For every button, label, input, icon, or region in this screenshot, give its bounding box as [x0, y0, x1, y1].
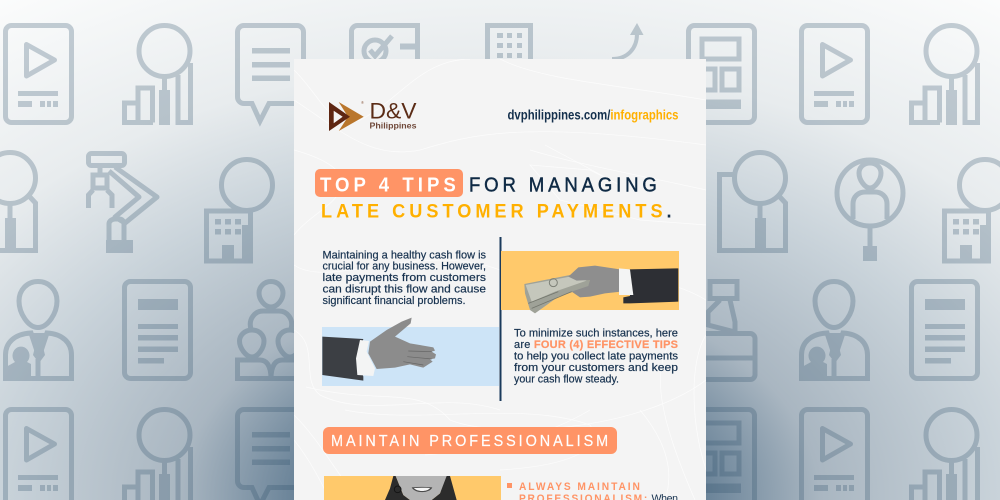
tips intro paragraph: are FOUR (4) EFFECTIVE TIPS — [514, 339, 678, 351]
intro paragraph: Maintaining a healthy cash flow is — [322, 249, 486, 261]
title highlight pill — [315, 169, 463, 197]
intro paragraph: late payments from customers — [322, 272, 487, 284]
tips intro paragraph: To minimize such instances, here — [514, 328, 678, 340]
website url: dvphilippines.com/infographics — [508, 106, 679, 122]
image: open hand on blue — [322, 318, 499, 386]
intro paragraph: crucial for any business. However, — [322, 261, 486, 273]
intro paragraph: can disrupt this flow and cause — [322, 284, 486, 296]
tips intro paragraph — [514, 328, 679, 386]
logo: D&V Philippines: D&V — [370, 98, 417, 123]
icon row 4 — [6, 410, 978, 500]
icon row 3 — [6, 282, 978, 381]
tips intro paragraph: from your customers and keep — [514, 362, 678, 374]
section heading: maintain professionalism — [323, 427, 617, 454]
icon row 2 — [0, 152, 1000, 261]
image: hand holding cash on yellow — [501, 251, 679, 313]
tip bullet text: ALWAYS MAINTAIN — [519, 481, 640, 493]
logo: D&V Philippines: Philippines — [370, 122, 417, 131]
section heading: maintain professionalism: MAINTAIN PROFESSIONALISM — [331, 433, 608, 450]
tips intro paragraph: to help you collect late payments — [514, 351, 679, 363]
image: smiling woman on yellow — [324, 476, 501, 500]
intro paragraph: significant financial problems. — [322, 295, 466, 307]
center divider line — [500, 237, 502, 401]
logo: D&V Philippines — [329, 98, 417, 131]
logo: D&V Philippines: ® — [361, 100, 364, 105]
tips intro paragraph: your cash flow steady. — [514, 374, 619, 386]
icon row 1 — [6, 23, 978, 125]
infographic page panel — [294, 59, 706, 500]
intro paragraph — [322, 249, 487, 307]
title: LATE CUSTOMER PAYMENTS. — [321, 200, 672, 221]
title — [315, 169, 672, 221]
title: FOR MANAGING — [469, 175, 657, 197]
title: TOP 4 TIPS — [320, 175, 456, 197]
tip bullet text — [507, 481, 678, 500]
